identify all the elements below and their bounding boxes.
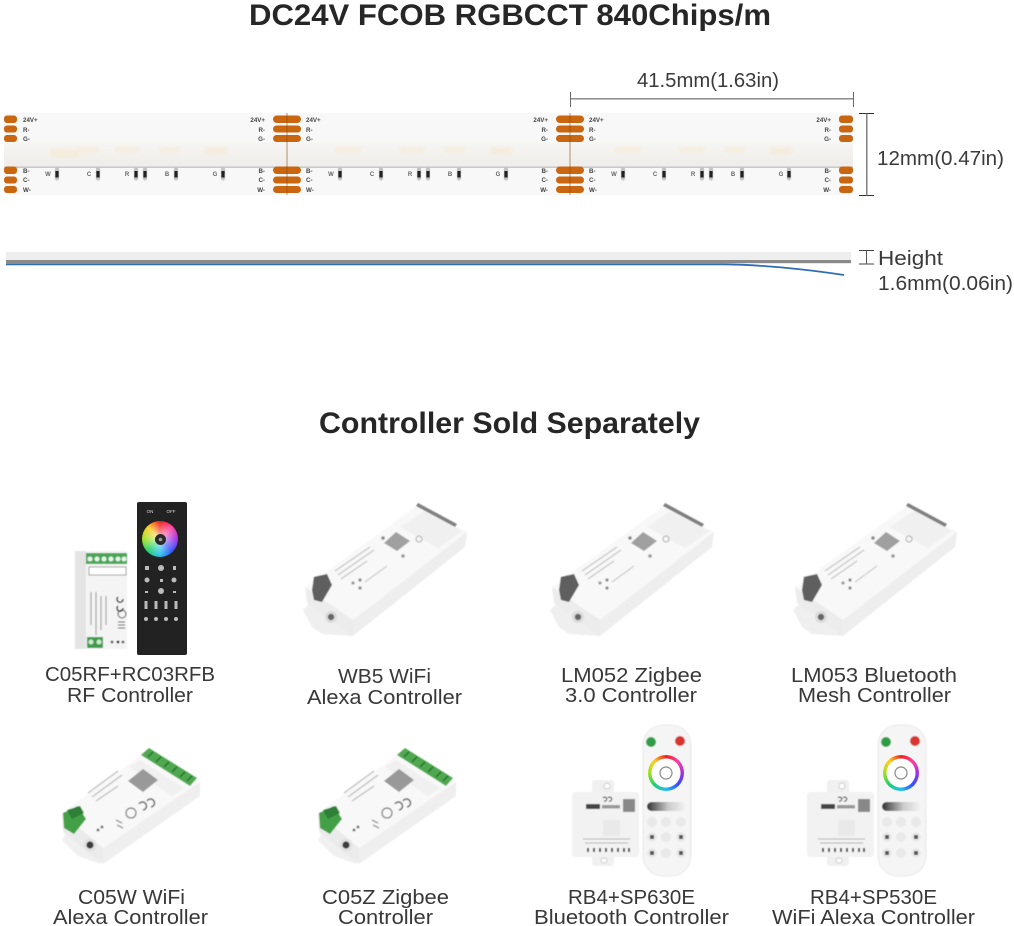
strip labels: G- xyxy=(258,136,265,143)
product: LM052: 3.0 Controller xyxy=(565,685,697,707)
product: LM053: LM053 Bluetooth xyxy=(791,665,957,687)
width dimension: 41.5mm(1.63in) xyxy=(637,70,779,92)
product: WB5: WB5 WiFi xyxy=(338,666,431,688)
strip labels: G- xyxy=(824,136,831,143)
strip labels: C- xyxy=(306,177,313,184)
strip labels: R- xyxy=(306,127,313,134)
strip labels: 24V+ xyxy=(533,117,548,124)
strip labels: W- xyxy=(257,187,265,194)
strip labels: C xyxy=(87,172,92,178)
strip labels: B xyxy=(731,172,736,178)
strip labels: W- xyxy=(823,187,831,194)
product: LM053 xyxy=(791,503,957,707)
section heading: Controller Sold Separately xyxy=(319,407,700,440)
strip labels: G- xyxy=(23,136,30,143)
strip labels: W xyxy=(328,172,334,178)
strip labels: R- xyxy=(824,127,831,134)
strip labels: R- xyxy=(589,127,596,134)
component marks xyxy=(55,168,791,180)
product: LM052: LM052 Zigbee xyxy=(561,665,702,687)
strip labels: R xyxy=(408,172,413,178)
strip labels: W xyxy=(45,172,51,178)
strip labels: R- xyxy=(23,127,30,134)
strip labels: G- xyxy=(306,136,313,143)
product: RB4+SP630E xyxy=(534,725,729,926)
LED diffused band xyxy=(4,142,853,168)
product: RB4+SP630E: RB4+SP630E xyxy=(568,887,695,909)
strip labels: G- xyxy=(541,136,548,143)
strip labels: B xyxy=(165,172,170,178)
strip labels: 24V+ xyxy=(23,117,38,124)
strip labels: B- xyxy=(589,168,596,175)
product: C05W: C05W WiFi xyxy=(78,887,185,909)
strip labels: C- xyxy=(541,177,548,184)
product: RB4+SP530E xyxy=(772,725,975,926)
strip labels: C- xyxy=(589,177,596,184)
strip labels: G xyxy=(213,172,218,178)
strip labels: W- xyxy=(306,187,314,194)
product: LM053: Mesh Controller xyxy=(798,685,951,707)
receiver xyxy=(75,551,127,649)
strip labels: 24V+ xyxy=(589,117,604,124)
strip labels: 24V+ xyxy=(250,117,265,124)
strip labels: W- xyxy=(23,187,31,194)
remote xyxy=(137,502,187,655)
LED strip top view xyxy=(4,113,853,195)
strip labels: G xyxy=(779,172,784,178)
strip labels: C- xyxy=(258,177,265,184)
strip labels: B- xyxy=(306,168,313,175)
strip labels: R xyxy=(125,172,130,178)
strip labels: C xyxy=(370,172,375,178)
strip labels: 24V+ xyxy=(306,117,321,124)
strip labels: 24V+ xyxy=(816,117,831,124)
strip labels: C- xyxy=(23,177,30,184)
strip labels: G- xyxy=(589,136,596,143)
strip labels: R xyxy=(691,172,696,178)
label: C05RF+RC03RFB xyxy=(45,664,215,686)
strip labels xyxy=(23,117,831,194)
width dimension xyxy=(570,70,854,107)
height dimension: Height xyxy=(878,248,943,270)
label: RF Controller xyxy=(67,685,193,707)
product: C05RF+RC03RFB xyxy=(45,502,215,707)
strip width dimension xyxy=(859,114,1004,196)
strip labels: B- xyxy=(824,168,831,175)
strip labels: B- xyxy=(541,168,548,175)
strip labels: W- xyxy=(540,187,548,194)
remote: OFF xyxy=(166,509,176,514)
product: C05W xyxy=(53,748,208,926)
strip labels: C- xyxy=(824,177,831,184)
product: LM052 xyxy=(550,503,714,707)
product: C05Z xyxy=(318,748,456,926)
strip width dimension: 12mm(0.47in) xyxy=(877,148,1004,170)
strip labels: R- xyxy=(541,127,548,134)
product: WB5: Alexa Controller xyxy=(307,687,462,709)
product: C05Z: C05Z Zigbee xyxy=(322,887,449,909)
solder pads xyxy=(4,113,853,195)
strip labels: B- xyxy=(258,168,265,175)
height dimension xyxy=(859,248,1013,295)
strip labels: G xyxy=(496,172,501,178)
remote: ON xyxy=(147,509,153,514)
product: RB4+SP530E: RB4+SP530E xyxy=(810,887,937,909)
strip labels: R- xyxy=(258,127,265,134)
strip labels: B- xyxy=(23,168,30,175)
height dimension: 1.6mm(0.06in) xyxy=(878,273,1013,295)
LED strip side view xyxy=(6,252,851,275)
strip labels: B xyxy=(448,172,453,178)
strip labels: W- xyxy=(589,187,597,194)
strip labels: C xyxy=(653,172,658,178)
strip labels: W xyxy=(611,172,617,178)
label xyxy=(45,664,215,707)
product: WB5 xyxy=(303,503,467,709)
